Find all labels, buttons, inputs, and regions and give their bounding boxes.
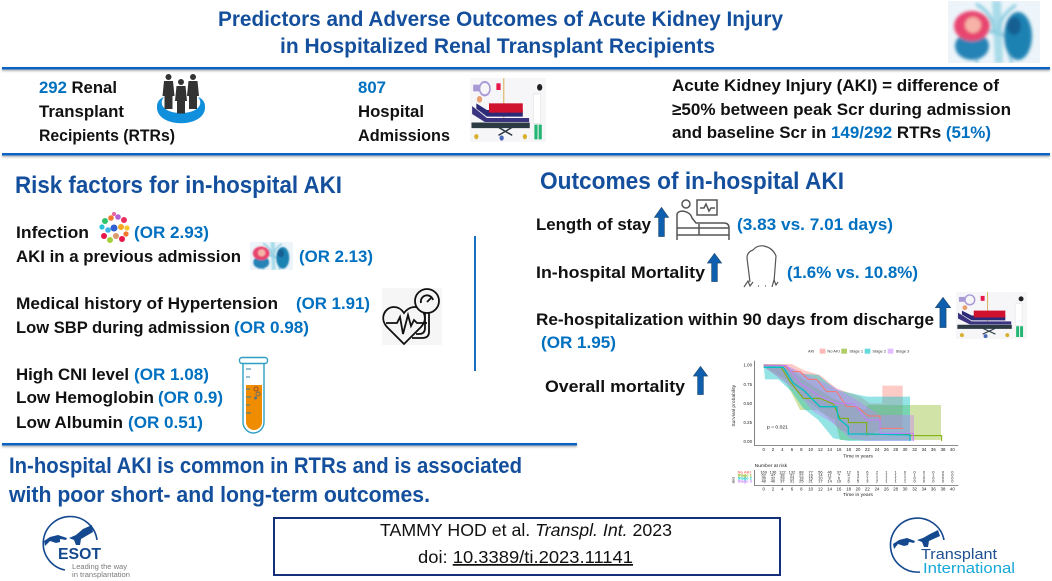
number at risk table: 0 (942, 479, 945, 484)
x axis labels: 16 (837, 447, 842, 452)
AKI definition (672, 76, 1011, 142)
outcome: re-hospitalization: (OR 1.95) (541, 333, 616, 352)
axes (754, 361, 958, 445)
survival curves (764, 365, 942, 441)
risk: hypertension: Medical history of Hypertension (16, 294, 278, 313)
number at risk table: 18 (846, 486, 852, 491)
number at risk table: 1 (895, 479, 898, 484)
number at risk table: 6 (848, 479, 851, 484)
panel: outcomes (536, 168, 1027, 498)
x axis labels: 32 (912, 447, 918, 452)
x axis labels: 8 (800, 447, 803, 452)
number at risk table: 0 (951, 473, 954, 478)
number at risk table: Stage 3 (738, 479, 753, 484)
risk: previous AKI (16, 247, 373, 266)
number at risk table: 0 (923, 470, 926, 475)
x axis labels: 10 (808, 447, 814, 452)
logo: ESOT: Leading the way (72, 564, 128, 571)
chart legend (808, 349, 910, 354)
icon: patient in hospital bed (470, 78, 546, 142)
x axis labels: 4 (781, 447, 784, 452)
number at risk table: 0 (951, 476, 954, 481)
outcome: length of stay (536, 215, 893, 234)
logo: ESOT: in transplantation (72, 572, 130, 579)
number at risk table: 21 (808, 479, 814, 484)
arrow: re-hospitalization up (936, 297, 950, 328)
risk: CNI (16, 365, 209, 384)
icon: kidneys (250, 242, 293, 270)
number at risk table: 32 (771, 476, 776, 481)
number at risk table: 24 (875, 486, 880, 491)
panel: risk factors (15, 172, 442, 433)
chart: Kaplan-Meier survival by AKI stage (731, 349, 958, 498)
number at risk table: 34 (922, 486, 927, 491)
number at risk table: 40 (950, 486, 955, 491)
number at risk table: Number at risk (755, 463, 788, 469)
number at risk table: 30 (903, 486, 908, 491)
number at risk table: 8 (829, 476, 832, 481)
number at risk table: 20 (856, 486, 861, 491)
stat: hospital admissions: 807 (358, 78, 386, 97)
number at risk table: AKI (731, 477, 736, 483)
y axis labels (744, 363, 753, 444)
number at risk table: 122 (779, 470, 786, 475)
p value: p = 0.021 (767, 424, 788, 430)
arrow: overall mortality up (693, 366, 708, 395)
x axis labels: 6 (791, 447, 794, 452)
title: Predictors and Adverse Outcomes of Acute Kidney Injury (218, 8, 783, 31)
number at risk table: 10 (837, 479, 842, 484)
x axis labels: 34 (922, 447, 927, 452)
outcome: length of stay: Length of stay (536, 215, 652, 234)
number at risk table: 12 (846, 470, 852, 475)
number at risk table: 31 (790, 479, 795, 484)
number at risk table: 2 (772, 486, 775, 491)
number at risk table: 14 (818, 473, 823, 478)
number at risk table: 1 (904, 476, 907, 481)
number at risk table: 0 (942, 470, 945, 475)
panel: study summary (39, 74, 1011, 145)
number at risk table: 11 (828, 473, 833, 478)
number at risk table: 8 (800, 486, 803, 491)
y axis title: Survival probability (731, 384, 737, 427)
logo: ESOT (43, 517, 130, 579)
number at risk table: Stage 1 (738, 473, 753, 478)
number at risk table: 0 (951, 479, 954, 484)
heading: outcomes: Outcomes of in-hospital AKI (540, 168, 844, 195)
outcome: length of stay: (3.83 vs. 7.01 days) (737, 215, 893, 234)
number at risk table: No AKI (738, 470, 751, 475)
arrow: length of stay up (654, 207, 669, 237)
number at risk table: 28 (893, 486, 899, 491)
number at risk table: 9 (857, 470, 860, 475)
number at risk table: 38 (941, 486, 946, 491)
number at risk table: 2 (866, 473, 869, 478)
risk: hypertension: (OR 1.91) (296, 294, 370, 313)
number at risk table: 10 (818, 476, 823, 481)
x axis labels: 24 (875, 447, 880, 452)
x axis labels: 22 (865, 447, 870, 452)
AKI definition: Acute Kidney Injury (AKI) = difference of (672, 76, 999, 95)
number at risk table: 0 (942, 476, 945, 481)
number at risk table: 6 (866, 470, 869, 475)
logo: ESOT: ESOT (58, 546, 101, 563)
chart legend: Stage 1 (849, 349, 864, 354)
x axis labels: 38 (941, 447, 946, 452)
number at risk table: 1 (885, 476, 888, 481)
risk: albumin: Low Albumin (16, 413, 123, 432)
number at risk table: 47 (771, 473, 776, 478)
number at risk table: 0 (914, 470, 917, 475)
risk: hemoglobin (16, 388, 223, 407)
outcome: in-hospital mortality: In-hospital Mortality (536, 263, 706, 282)
number at risk table (731, 463, 958, 498)
icon: people group (157, 74, 205, 123)
number at risk table: 88 (799, 470, 804, 475)
number at risk table: 46 (827, 470, 833, 475)
number at risk table: 77 (808, 470, 814, 475)
number at risk table: 23 (790, 476, 795, 481)
number at risk table: 3 (848, 476, 851, 481)
outcome: re-hospitalization: Re-hospitalization within 90 days from discharge (536, 310, 934, 329)
x axis labels: 36 (931, 447, 936, 452)
logo: Transplant International (890, 518, 1015, 577)
citation box: TAMMY HOD et al. Transpl. Int. 2023 (380, 520, 672, 540)
number at risk table: 1 (876, 473, 879, 478)
AKI definition: and baseline Scr in 149/292 RTRs (51%) (672, 123, 991, 142)
risk: CNI: High CNI level (16, 365, 129, 384)
lower left rule (2, 443, 577, 446)
number at risk table: 56 (818, 470, 823, 475)
stat: renal transplant recipients (39, 78, 175, 145)
stat: renal transplant recipients: Transplant (39, 102, 124, 121)
x axis labels: 2 (772, 447, 775, 452)
heading: risk factors: Risk factors for in-hospital AKI (15, 172, 342, 199)
number at risk table: 32 (912, 486, 918, 491)
number at risk table: 18 (799, 476, 804, 481)
number at risk table: 0 (932, 479, 935, 484)
citation box (274, 518, 780, 575)
risk: low SBP: Low SBP during admission (16, 318, 230, 337)
x axis labels: 40 (950, 447, 955, 452)
citation box: doi: 10.3389/ti.2023.11141 (418, 547, 633, 567)
conclusion: with poor short- and long-term outcomes. (8, 482, 430, 507)
number at risk table: 169 (760, 470, 768, 475)
number at risk table: 12 (818, 486, 823, 491)
risk: albumin: (OR 0.51) (128, 413, 203, 432)
stat: hospital admissions: Admissions (358, 126, 450, 145)
y axis labels: 0.50 (744, 401, 753, 406)
number at risk table: 3 (857, 473, 860, 478)
risk: infection: (OR 2.93) (134, 223, 209, 242)
number at risk table: 0 (932, 476, 935, 481)
risk: infection (16, 223, 209, 242)
number at risk table: 136 (770, 470, 777, 475)
number at risk table: 2 (857, 476, 860, 481)
x axis labels: 14 (827, 447, 833, 452)
number at risk table: 40 (771, 479, 776, 484)
number at risk table: 6 (838, 476, 841, 481)
icon: infection microbes (99, 212, 130, 243)
number at risk table: 0 (904, 470, 907, 475)
chart legend: Stage 2 (872, 349, 887, 354)
x axis labels: 20 (856, 447, 861, 452)
number at risk table: 25 (799, 479, 804, 484)
number at risk table: 0 (942, 473, 945, 478)
number at risk table: 62 (761, 473, 767, 478)
icon: patient bed monitor (677, 200, 729, 240)
chart legend: AKI (808, 349, 814, 354)
y axis labels: 1.00 (744, 363, 753, 368)
number at risk table: 1 (923, 473, 926, 478)
x axis title: Time in years (843, 453, 873, 459)
number at risk table: 10 (808, 486, 814, 491)
number at risk table: 16 (837, 486, 842, 491)
number at risk table: 31 (790, 473, 795, 478)
number at risk table: 1 (904, 473, 907, 478)
y axis labels: 0.25 (744, 420, 753, 425)
number at risk table: 0 (923, 479, 926, 484)
stat: hospital admissions: Hospital (358, 102, 424, 121)
number at risk table: 3 (866, 479, 869, 484)
number at risk table: 1 (895, 476, 898, 481)
number at risk table: 38 (780, 473, 785, 478)
number at risk table: 1 (866, 476, 869, 481)
number at risk table: Stage 2 (738, 476, 753, 481)
conclusion (8, 453, 522, 507)
top rule (2, 67, 1050, 70)
number at risk table: 1 (895, 470, 898, 475)
logo: Transplant International: International (923, 560, 1015, 577)
logo: Transplant International: Transplant (921, 546, 998, 563)
title (218, 8, 783, 58)
title: in Hospitalized Renal Transplant Recipients (280, 35, 715, 58)
icon: kidneys header image (948, 1, 1040, 63)
risk: previous AKI: (OR 2.13) (299, 247, 373, 266)
outcome: overall mortality: Overall mortality (545, 377, 686, 396)
number at risk table: 6 (791, 486, 794, 491)
outcome: re-hospitalization (536, 310, 934, 352)
number at risk table: 132 (789, 470, 796, 475)
risk: hemoglobin: Low Hemoglobin (16, 388, 154, 407)
number at risk table: 7 (838, 473, 841, 478)
number at risk table: 0 (914, 476, 917, 481)
arrow: mortality up (707, 253, 722, 282)
number at risk table: 0 (932, 470, 935, 475)
number at risk table: 1 (914, 473, 917, 478)
risk: previous AKI: AKI in a previous admission (16, 247, 241, 266)
stat: renal transplant recipients: 292 Renal (39, 78, 117, 97)
number at risk table: 4 (781, 486, 784, 491)
y axis labels: 0.75 (744, 382, 753, 387)
number at risk table: 1 (904, 479, 907, 484)
stat: hospital admissions (358, 78, 450, 145)
risk: infection: Infection (16, 223, 89, 242)
x axis labels (762, 447, 955, 452)
number at risk table: 37 (780, 479, 785, 484)
number at risk table: 14 (827, 479, 833, 484)
number at risk table: 1 (885, 470, 888, 475)
outcome: in-hospital mortality: (1.6% vs. 10.8%) (787, 263, 918, 282)
number at risk table: 0 (923, 476, 926, 481)
number at risk table: 1 (885, 473, 888, 478)
icon: heart with blood pressure gauge (382, 288, 442, 345)
number at risk table: 1 (895, 473, 898, 478)
number at risk table: 1 (885, 479, 888, 484)
x axis labels: 12 (818, 447, 823, 452)
x axis labels: 26 (884, 447, 889, 452)
AKI definition: ≥50% between peak Scr during admission (672, 100, 1011, 119)
number at risk table: 26 (884, 486, 889, 491)
icon: test tube (240, 358, 268, 433)
number at risk table: 39 (761, 476, 767, 481)
number at risk table: 22 (865, 486, 870, 491)
number at risk table: 15 (808, 476, 814, 481)
x axis labels: 30 (903, 447, 908, 452)
number at risk table: 0 (914, 479, 917, 484)
conclusion: In-hospital AKI is common in RTRs and is associated (9, 453, 522, 478)
stat: renal transplant recipients: Recipients (RTRs) (39, 126, 175, 145)
middle rule (2, 153, 1050, 156)
vertical divider (474, 236, 476, 371)
x axis labels: 0 (762, 447, 765, 452)
number at risk table: 14 (827, 486, 833, 491)
number at risk table: 4 (848, 473, 851, 478)
number at risk table: Time in years (843, 492, 873, 498)
number at risk table: 5 (857, 479, 860, 484)
number at risk table: 1 (932, 473, 935, 478)
chart legend: No AKI (827, 349, 840, 354)
risk: albumin (16, 413, 203, 432)
number at risk table: 2 (876, 479, 879, 484)
number at risk table: 36 (931, 486, 936, 491)
risk: hemoglobin: (OR 0.9) (158, 388, 223, 407)
number at risk table: 17 (818, 479, 823, 484)
x axis labels: 18 (846, 447, 852, 452)
number at risk table: 48 (761, 479, 767, 484)
outcome: in-hospital mortality (536, 263, 918, 282)
icon: tombstone (744, 246, 778, 287)
icon: patient in hospital bed (956, 292, 1027, 339)
risk: CNI: (OR 1.08) (134, 365, 209, 384)
number at risk table: 37 (837, 470, 842, 475)
number at risk table: 0 (762, 486, 765, 491)
y axis labels: 0.00 (744, 439, 753, 444)
chart legend: Stage 3 (896, 349, 910, 354)
x axis labels: 28 (893, 447, 899, 452)
number at risk table: 28 (780, 476, 785, 481)
confidence bands (764, 364, 941, 441)
risk: low SBP: (OR 0.98) (234, 318, 309, 337)
number at risk table: 0 (951, 470, 954, 475)
number at risk table: 2 (876, 470, 879, 475)
number at risk table: 16 (808, 473, 814, 478)
number at risk table: 22 (799, 473, 804, 478)
number at risk table: 1 (876, 476, 879, 481)
